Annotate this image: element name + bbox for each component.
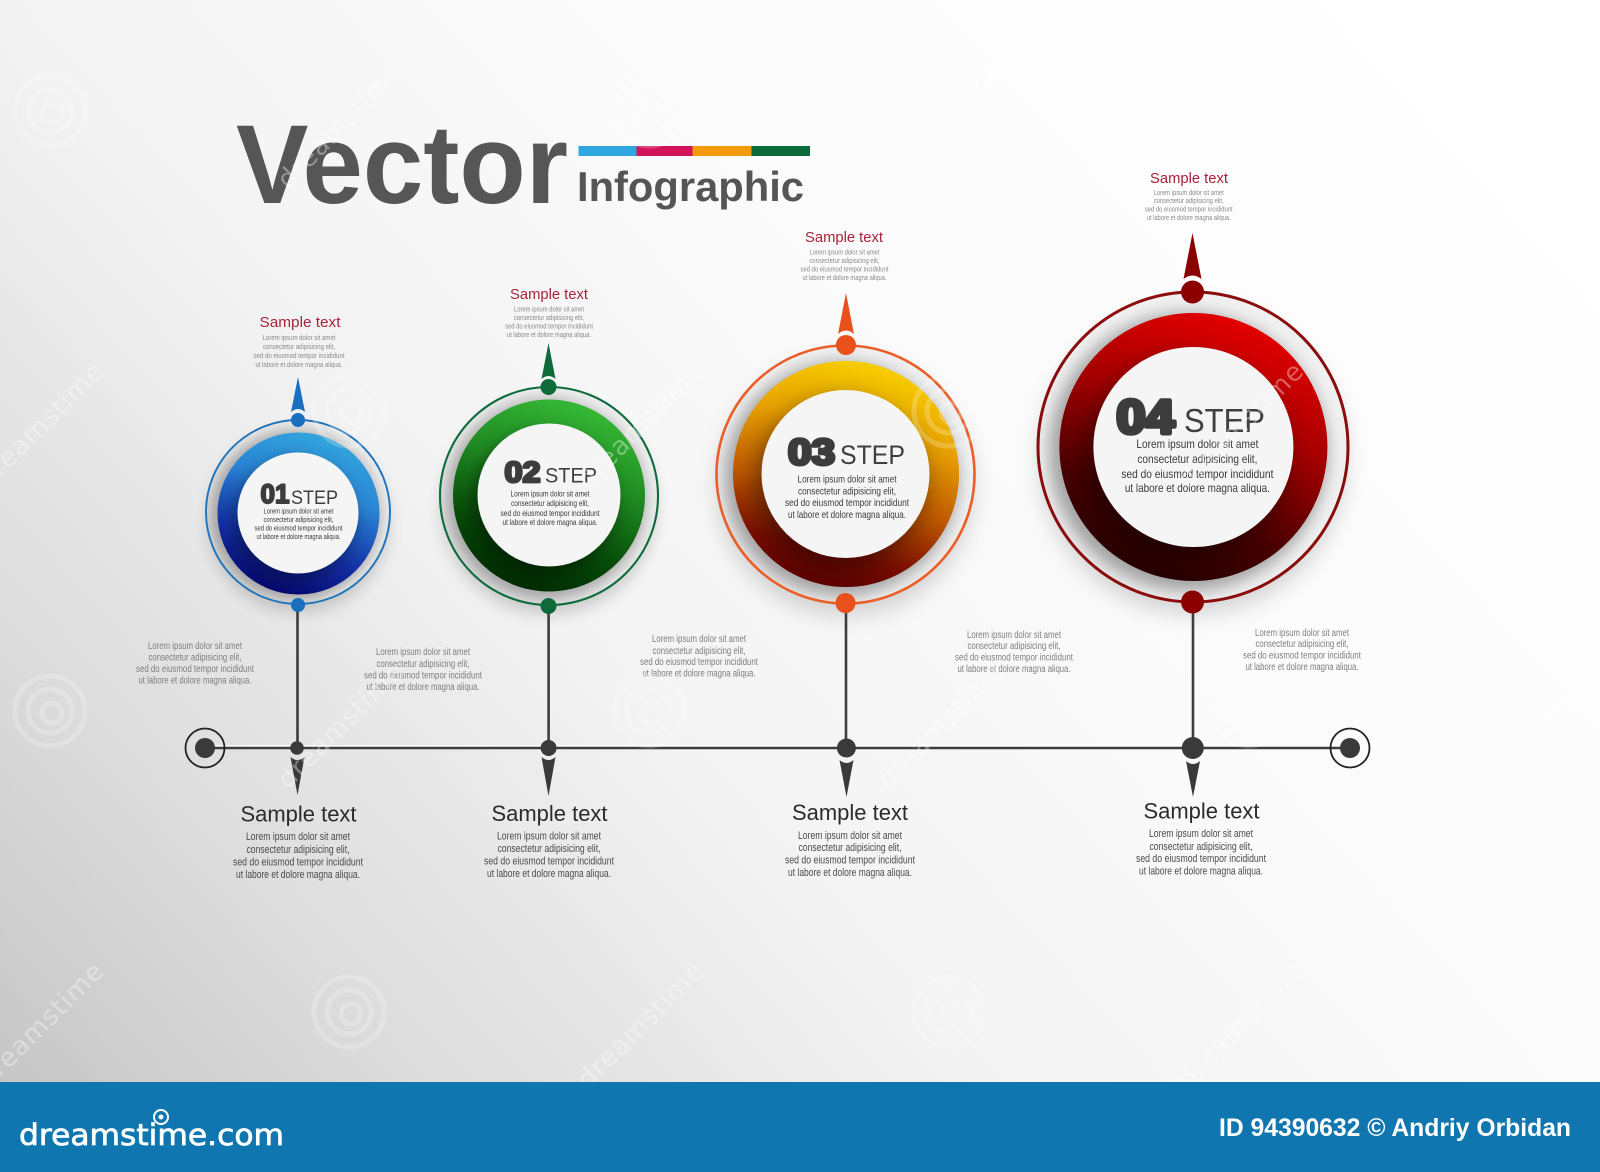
top pointer (1181, 233, 1204, 304)
step label: 01 (260, 479, 290, 509)
watermark overlay: dreamstime (1172, 956, 1310, 1095)
footer bar (0, 1082, 1600, 1172)
top caption (505, 286, 594, 339)
step text: Lorem ipsum dolor sit amet (1136, 437, 1259, 451)
bottom caption: ut labore et dolore magna aliqua. (1139, 866, 1263, 878)
side note 2: Lorem ipsum dolor sit amet (376, 647, 470, 658)
side note 1: Lorem ipsum dolor sit amet (148, 641, 242, 652)
step label: STEP (291, 487, 338, 509)
step text: consectetur adipisicing elit, (511, 498, 589, 508)
top caption: sed do eiusmod tempor incididunt (254, 351, 345, 360)
bottom caption: Lorem ipsum dolor sit amet (1149, 828, 1253, 840)
top caption: ut labore et dolore magna aliqua. (802, 273, 886, 282)
watermark overlay: dreamstime (1172, 356, 1310, 495)
step label (788, 432, 905, 472)
title (236, 102, 810, 227)
bottom caption: sed do eiusmod tempor incididunt (785, 854, 915, 866)
side note 5 (1243, 628, 1361, 673)
top caption: ut labore et dolore magna aliqua. (1147, 213, 1231, 222)
circle: step 3 (716, 346, 974, 614)
bottom caption: sed do eiusmod tempor incididunt (484, 856, 614, 868)
side note 5: sed do eiusmod tempor incididunt (1243, 650, 1361, 662)
bottom caption: ut labore et dolore magna aliqua. (788, 867, 912, 879)
title word: Infographic: Infographic (577, 163, 804, 210)
step text: Lorem ipsum dolor sit amet (798, 474, 897, 486)
side note 2 (364, 647, 482, 693)
step 4 (1038, 170, 1348, 878)
bottom caption: Sample text (792, 800, 908, 825)
top caption: Sample text (510, 286, 589, 303)
side note 1: consectetur adipisicing elit, (148, 652, 242, 664)
top caption: sed do eiusmod tempor incididunt (800, 264, 889, 274)
side note 3: Lorem ipsum dolor sit amet (652, 634, 746, 645)
top caption (1145, 170, 1233, 222)
bottom caption (785, 800, 915, 879)
step text: consectetur adipisicing elit, (798, 486, 896, 498)
bottom caption: Lorem ipsum dolor sit amet (798, 830, 902, 842)
step text: Lorem ipsum dolor sit amet (264, 506, 334, 516)
step 3 (716, 229, 974, 879)
step text (254, 506, 343, 541)
side note 3: sed do eiusmod tempor incididunt (640, 657, 758, 668)
timeline start cap (186, 728, 224, 768)
step text (500, 488, 600, 527)
top caption: Lorem ipsum dolor sit amet (1154, 188, 1224, 197)
top caption: consectetur adipisicing elit, (263, 342, 335, 351)
side note 3: ut labore et dolore magna aliqua. (642, 668, 756, 680)
top caption: Lorem ipsum dolor sit amet (262, 333, 336, 342)
side note 2: consectetur adipisicing elit, (376, 659, 470, 670)
top caption: consectetur adipisicing elit, (514, 313, 584, 322)
circle: step 2 (440, 387, 658, 614)
bottom caption: Sample text (240, 802, 356, 827)
step label (504, 457, 597, 489)
top caption: ut labore et dolore magna aliqua. (507, 330, 591, 339)
top caption (254, 314, 345, 369)
down arrow (1186, 761, 1200, 797)
side note 4: Lorem ipsum dolor sit amet (967, 630, 1061, 641)
step label: STEP (1184, 403, 1265, 440)
bottom caption: sed do eiusmod tempor incididunt (233, 856, 363, 868)
top caption: Sample text (805, 229, 884, 246)
bottom caption (484, 801, 614, 880)
step label: 04 (1116, 390, 1174, 443)
step text: ut labore et dolore magna aliqua. (788, 509, 906, 521)
step label: STEP (840, 440, 905, 470)
side note 1: ut labore et dolore magna aliqua. (138, 676, 252, 686)
side note 2: sed do eiusmod tempor incididunt (364, 670, 482, 682)
step text: sed do eiusmod tempor incididunt (785, 497, 909, 509)
top caption: Lorem ipsum dolor sit amet (514, 304, 585, 314)
top pointer (291, 377, 305, 427)
bottom caption: Lorem ipsum dolor sit amet (497, 830, 601, 842)
step 2 (440, 286, 658, 880)
side note 1 (136, 641, 254, 686)
top caption: ut labore et dolore magna aliqua. (256, 360, 342, 369)
step text: ut labore et dolore magna aliqua. (1125, 481, 1270, 495)
colour bar (578, 146, 810, 156)
bottom caption: consectetur adipisicing elit, (498, 843, 600, 855)
top caption: sed do eiusmod tempor incididunt (1145, 204, 1233, 214)
down arrow (840, 760, 854, 797)
watermark overlay: dreamstime (872, 656, 1010, 795)
bottom connector (290, 598, 305, 755)
timeline end cap (1330, 728, 1370, 768)
bottom caption: Lorem ipsum dolor sit amet (246, 831, 350, 843)
side note 5: Lorem ipsum dolor sit amet (1255, 628, 1349, 639)
bottom connector (836, 593, 856, 758)
side note 4 (955, 630, 1073, 675)
side note 4: ut labore et dolore magna aliqua. (958, 664, 1070, 675)
step text: ut labore et dolore magna aliqua. (256, 532, 340, 541)
step text: sed do eiusmod tempor incididunt (254, 524, 343, 532)
watermark overlay: dreamstime (572, 956, 710, 1095)
down arrow (290, 757, 304, 795)
footer logo: dreamstime.com (19, 1118, 284, 1152)
watermark overlay: dreamstime (272, 656, 410, 795)
step label: 02 (504, 457, 540, 489)
top caption: sed do eiusmod tempor incididunt (505, 322, 594, 330)
down arrow (542, 757, 556, 796)
top caption: Sample text (1150, 170, 1229, 187)
bottom caption: Sample text (1144, 799, 1260, 824)
step text: ut labore et dolore magna aliqua. (502, 517, 598, 527)
top caption: consectetur adipisicing elit, (1154, 196, 1224, 205)
watermark overlay: dreamstime (272, 56, 410, 195)
bottom connector (1181, 590, 1204, 759)
title word: Vector: Vector (236, 102, 568, 227)
step label (1116, 390, 1265, 443)
step label: 03 (788, 432, 835, 472)
step text: sed do eiusmod tempor incididunt (500, 508, 600, 518)
bottom caption: ut labore et dolore magna aliqua. (236, 869, 360, 881)
top caption: Sample text (260, 314, 341, 331)
step label: STEP (545, 463, 597, 488)
top caption: consectetur adipisicing elit, (810, 256, 880, 265)
watermark overlay: dreamstime (872, 56, 1010, 195)
top pointer (540, 343, 556, 395)
side note 3 (640, 634, 758, 680)
bottom caption: Sample text (492, 801, 608, 826)
side note 5: consectetur adipisicing elit, (1256, 639, 1348, 650)
bottom caption: consectetur adipisicing elit, (246, 844, 350, 856)
bottom caption (233, 802, 363, 881)
step text: Lorem ipsum dolor sit amet (510, 488, 590, 498)
footer credit: ID 94390632 © Andriy Orbidan (1219, 1115, 1571, 1142)
side note 3: consectetur adipisicing elit, (652, 646, 746, 657)
step text: sed do eiusmod tempor incididunt (1121, 467, 1274, 481)
side note 2: ut labore et dolore magna aliqua. (366, 682, 480, 693)
bottom caption: sed do eiusmod tempor incididunt (1136, 853, 1266, 865)
top caption (800, 229, 889, 282)
side note 4: sed do eiusmod tempor incididunt (955, 652, 1073, 664)
step 1 (206, 314, 390, 881)
top caption: Lorem ipsum dolor sit amet (810, 248, 880, 256)
side note 5: ut labore et dolore magna aliqua. (1246, 662, 1358, 673)
side note 4: consectetur adipisicing elit, (968, 641, 1060, 652)
step text: consectetur adipisicing elit, (1137, 452, 1257, 466)
step label (260, 479, 338, 509)
step text: consectetur adipisicing elit, (264, 515, 334, 524)
bottom caption: consectetur adipisicing elit, (1150, 841, 1252, 853)
circle: step 1 (206, 420, 390, 612)
top pointer (836, 293, 856, 355)
bottom connector (540, 598, 557, 756)
step text (785, 474, 909, 521)
circle: step 4 (1038, 292, 1348, 613)
bottom caption: consectetur adipisicing elit, (798, 842, 902, 854)
bottom caption: ut labore et dolore magna aliqua. (487, 868, 611, 880)
watermark overlay: dreamstime (572, 356, 710, 495)
bottom caption (1136, 799, 1266, 878)
step text (1121, 437, 1274, 495)
side note 1: sed do eiusmod tempor incididunt (136, 664, 254, 675)
timeline (186, 728, 1370, 768)
